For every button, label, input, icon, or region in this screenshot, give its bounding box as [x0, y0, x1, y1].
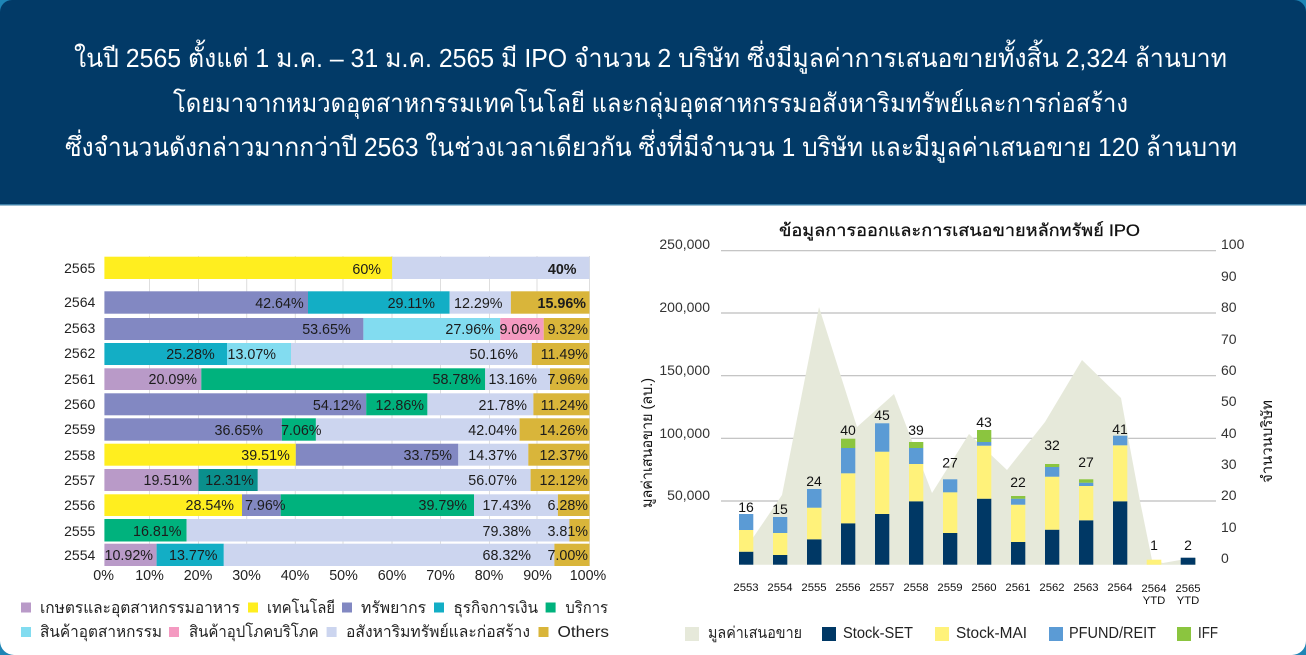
row 2556: 7.96% [245, 498, 286, 514]
row 2564 [64, 291, 590, 314]
combo chart: IPO offering value and company count [659, 236, 1245, 607]
industry legend [21, 598, 609, 642]
row 2557: 19.51% [144, 473, 192, 489]
bar value labels: 15 [772, 501, 788, 517]
row 2561 [64, 368, 590, 390]
row 2559: 42.04% [468, 423, 517, 439]
area: offering value [744, 307, 1196, 565]
row 2561: 58.78% [432, 372, 481, 388]
row 2556: 17.43% [482, 498, 531, 514]
row 2564: 29.11% [388, 296, 435, 312]
row 2565: 40% [548, 262, 577, 278]
row 2564: 2564 [64, 294, 96, 310]
header banner [0, 0, 1306, 206]
right count axis: 80 [1221, 299, 1237, 315]
row 2562: 13.07% [228, 347, 276, 363]
row 2560: 21.78% [478, 398, 527, 414]
right count axis [1221, 236, 1245, 566]
header banner: ในปี 2565 ตั้งแต่ 1 ม.ค. – 31 ม.ค. 2565 มี IPO จำนวน 2 บริษัท ซึ่งมีมูลค่าการเสนอขายทั้งสิ้น 2,324 ล้านบาท [74, 39, 1227, 74]
percent axis: 0% [93, 568, 114, 584]
row 2554 [64, 544, 590, 566]
row 2564: 12.29% [454, 296, 503, 312]
right count axis: 0 [1221, 550, 1229, 566]
row 2555: 3.81% [547, 524, 588, 540]
left value axis: 100,000 [659, 425, 710, 441]
row 2555: 79.38% [482, 524, 531, 540]
bar value labels: 41 [1112, 421, 1128, 437]
row 2563: 9.32% [547, 322, 588, 338]
row 2560: 2560 [64, 396, 96, 412]
year axis [733, 582, 1201, 607]
row 2557: 56.07% [468, 473, 517, 489]
row 2557: 12.12% [540, 473, 588, 489]
right count axis: 90 [1221, 268, 1237, 284]
row 2560 [64, 393, 590, 415]
row 2559: 14.26% [540, 423, 588, 439]
row 2556 [64, 494, 590, 516]
year axis: 2555 [801, 582, 827, 594]
bar value labels: 27 [1078, 454, 1094, 470]
bar value labels [738, 407, 1192, 553]
year axis: 2562 [1039, 582, 1065, 594]
row 2559: 7.06% [281, 423, 322, 439]
industry legend: บริการ [565, 600, 608, 617]
right count axis: 70 [1221, 331, 1237, 347]
year axis: 2565 [1175, 583, 1201, 595]
row 2555: 2555 [64, 523, 96, 539]
right count axis: 100 [1221, 236, 1245, 252]
bar value labels: 40 [840, 422, 856, 438]
industry legend: ธุรกิจการเงิน [454, 600, 538, 618]
right count axis: 20 [1221, 487, 1237, 503]
row 2562: 25.28% [166, 347, 215, 363]
year axis: YTD [1143, 595, 1165, 607]
row 2565: 60% [352, 262, 381, 278]
row 2562: 2562 [64, 345, 96, 361]
row 2560: 54.12% [313, 398, 362, 414]
industry legend: สินค้าอุตสาหกรรม [40, 623, 162, 642]
industry legend: สินค้าอุปโภคบริโภค [189, 622, 319, 642]
percent axis: 80% [475, 568, 504, 584]
percent axis: 50% [329, 568, 358, 584]
row 2554: 7.00% [547, 548, 588, 564]
row 2556: 6.28% [547, 498, 588, 514]
row 2556: 39.79% [418, 498, 467, 514]
chart legend: PFUND/REIT [1069, 625, 1156, 642]
year axis: 2554 [767, 582, 793, 594]
row 2562 [64, 343, 590, 365]
row 2561: 7.96% [547, 372, 588, 388]
row 2564: 15.96% [538, 296, 586, 312]
percent axis: 40% [281, 568, 310, 584]
row 2558: 39.51% [241, 448, 290, 464]
row 2560: 11.24% [541, 398, 588, 414]
industry legend: เกษตรและอุตสาหกรรมอาหาร [40, 600, 240, 618]
header banner: โดยมาจากหมวดอุตสาหกรรมเทคโนโลยี และกลุ่มอุตสาหกรรมอสังหาริมทรัพย์และการก่อสร้าง [173, 88, 1128, 119]
right axis title: จำนวนบริษัท [1259, 400, 1276, 483]
bar value labels: 39 [908, 422, 924, 438]
left axis title: มูลค่าเสนอขาย (ลบ.) [639, 378, 656, 508]
industry legend: ทรัพยากร [361, 600, 426, 617]
right chart title: ข้อมูลการออกและการเสนอขายหลักทรัพย์ IPO [779, 221, 1140, 241]
industry legend: เทคโนโลยี [267, 598, 335, 617]
row 2564: 42.64% [255, 296, 304, 312]
percent axis [93, 568, 607, 584]
percent axis: 30% [232, 568, 261, 584]
row 2558 [64, 444, 590, 466]
row 2561: 13.16% [488, 372, 537, 388]
row 2559: 36.65% [214, 423, 263, 439]
chart legend: Stock-MAI [956, 625, 1027, 642]
bar value labels: 45 [874, 407, 890, 423]
row 2556: 2556 [64, 497, 96, 513]
year axis: 2553 [733, 582, 759, 594]
row 2557: 2557 [64, 472, 96, 488]
bar value labels: 2 [1184, 537, 1192, 553]
row 2558: 14.37% [468, 448, 517, 464]
row 2558: 2558 [64, 447, 96, 463]
row 2558: 33.75% [404, 448, 452, 464]
year axis: 2557 [869, 582, 895, 594]
row 2565 [64, 257, 590, 279]
row 2561: 2561 [64, 371, 96, 387]
row 2562: 11.49% [541, 347, 588, 363]
left value axis: 50,000 [667, 487, 710, 503]
chart legend: มูลค่าเสนอขาย [708, 625, 802, 643]
year axis: 2564 [1141, 583, 1167, 595]
percent axis: 90% [523, 568, 552, 584]
year axis: 2560 [971, 582, 997, 594]
bar value labels: 32 [1044, 437, 1060, 453]
bar value labels: 27 [942, 454, 958, 470]
row 2556: 28.54% [186, 498, 234, 514]
row 2563: 27.96% [445, 322, 494, 338]
row 2563 [64, 318, 590, 340]
right count axis: 60 [1221, 362, 1237, 378]
row 2555 [64, 519, 590, 542]
row 2561: 20.09% [148, 372, 197, 388]
right count axis: 40 [1221, 425, 1237, 441]
bar value labels: 43 [976, 414, 992, 430]
row 2554: 13.77% [169, 548, 218, 564]
left value axis [659, 236, 710, 503]
percent axis: 20% [184, 568, 213, 584]
right count axis: 10 [1221, 519, 1237, 535]
year axis: 2558 [903, 582, 929, 594]
percent axis: 70% [426, 568, 455, 584]
row 2560: 12.86% [376, 398, 424, 414]
row 2563: 53.65% [302, 322, 351, 338]
year axis: 2564 [1107, 582, 1133, 594]
year axis: 2561 [1005, 582, 1031, 594]
left value axis: 200,000 [659, 299, 710, 315]
bar value labels: 22 [1010, 474, 1026, 490]
bar value labels: 24 [806, 473, 822, 489]
row 2558: 12.37% [540, 448, 588, 464]
row 2555: 16.81% [133, 524, 182, 540]
row 2563: 2563 [64, 320, 96, 336]
bar value labels: 16 [738, 499, 754, 515]
percent axis: 60% [378, 568, 407, 584]
bar value labels: 1 [1150, 537, 1158, 553]
chart legend [685, 625, 1218, 643]
header banner: ซึ่งจำนวนดังกล่าวมากกว่าปี 2563 ในช่วงเวลาเดียวกัน ซึ่งที่มีจำนวน 1 บริษัท และมีมูลค่าเสนอขาย 120 ล้านบาท [65, 129, 1237, 163]
year axis: 2556 [835, 582, 861, 594]
year axis: 2563 [1073, 582, 1099, 594]
left value axis: 250,000 [659, 236, 710, 252]
bars: stacked company counts [739, 423, 1195, 565]
row 2563: 9.06% [499, 322, 540, 338]
industry legend: อสังหาริมทรัพย์และก่อสร้าง [346, 622, 530, 641]
row 2554: 2554 [64, 547, 96, 563]
year axis: YTD [1177, 595, 1199, 607]
row 2562: 50.16% [470, 347, 518, 363]
right count axis: 50 [1221, 393, 1237, 409]
chart legend: IFF [1198, 625, 1218, 642]
percent axis: 100% [570, 568, 607, 584]
chart legend: Stock-SET [843, 625, 913, 642]
row 2559 [64, 418, 590, 441]
row 2559: 2559 [64, 421, 96, 437]
industry legend: Others [558, 624, 609, 641]
right count axis: 30 [1221, 456, 1237, 472]
left value axis: 150,000 [659, 362, 710, 378]
row 2554: 10.92% [104, 548, 153, 564]
stacked bar chart: IPO share by industry [64, 256, 607, 584]
row 2565: 2565 [64, 260, 96, 276]
row 2557 [64, 469, 590, 491]
percent axis: 10% [135, 568, 164, 584]
row 2554: 68.32% [482, 548, 531, 564]
year axis: 2559 [937, 582, 963, 594]
row 2557: 12.31% [205, 473, 254, 489]
